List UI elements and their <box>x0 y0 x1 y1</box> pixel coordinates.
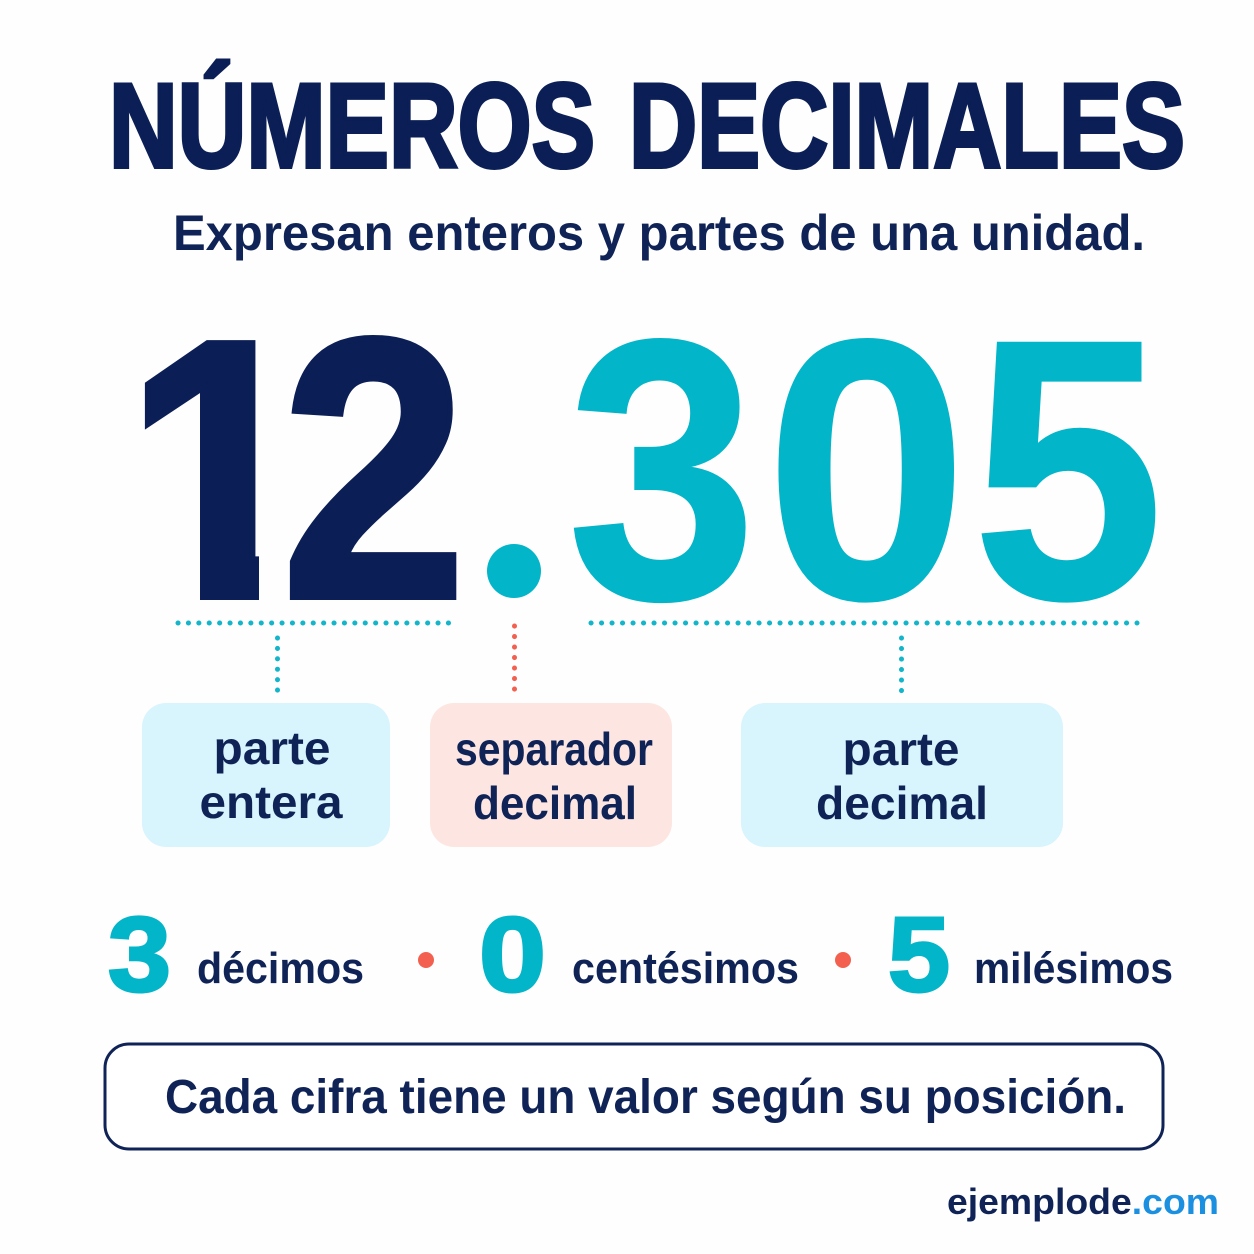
decimal part: 305 <box>567 262 1164 677</box>
title: NÚMEROS <box>109 59 595 193</box>
label: parte entera: entera <box>200 776 343 828</box>
bracket: integer part <box>178 623 449 694</box>
stem fill of the 1 <box>200 388 210 600</box>
digit 5: 5 <box>888 896 950 1014</box>
connector: separator <box>512 626 517 694</box>
decimal part: 305: 5 <box>972 262 1164 677</box>
brand: ejemplode.com: ejemplode.com <box>947 1181 1219 1222</box>
label: separador decimal: decimal <box>473 777 637 829</box>
digit 0: 0 <box>479 896 546 1014</box>
title <box>109 59 1185 193</box>
centésimos: centésimos <box>572 944 799 993</box>
label: separador decimal: separador <box>455 723 653 775</box>
label: parte decimal: decimal <box>816 777 988 829</box>
place values row <box>108 896 1173 1014</box>
label: separador decimal <box>430 703 672 847</box>
big number: 12.305 <box>120 261 1164 677</box>
integer part: 1: 1 <box>124 264 317 676</box>
milésimos: milésimos <box>974 944 1173 993</box>
décimos: décimos <box>197 944 364 993</box>
subtitle: Expresan enteros y partes de una unidad. <box>173 205 1145 261</box>
label: parte entera: parte <box>214 722 330 774</box>
callout <box>105 1044 1163 1149</box>
label: parte entera <box>142 703 390 847</box>
digit 3: 3 <box>108 896 171 1014</box>
decimal part: 305: 3 <box>567 262 757 677</box>
bracket: decimal part <box>591 623 1137 694</box>
decimal part: 305: 0 <box>765 262 968 677</box>
mask over the foot of the 1 <box>120 535 330 610</box>
label: parte decimal <box>741 703 1063 847</box>
decimal separator dot <box>487 544 541 598</box>
separator dot <box>418 952 434 968</box>
callout: Cada cifra tiene un valor según su posición. <box>165 1071 1126 1124</box>
separator dot <box>835 952 851 968</box>
label: parte decimal: parte <box>842 723 960 775</box>
integer part: 2: 2 <box>281 261 467 676</box>
